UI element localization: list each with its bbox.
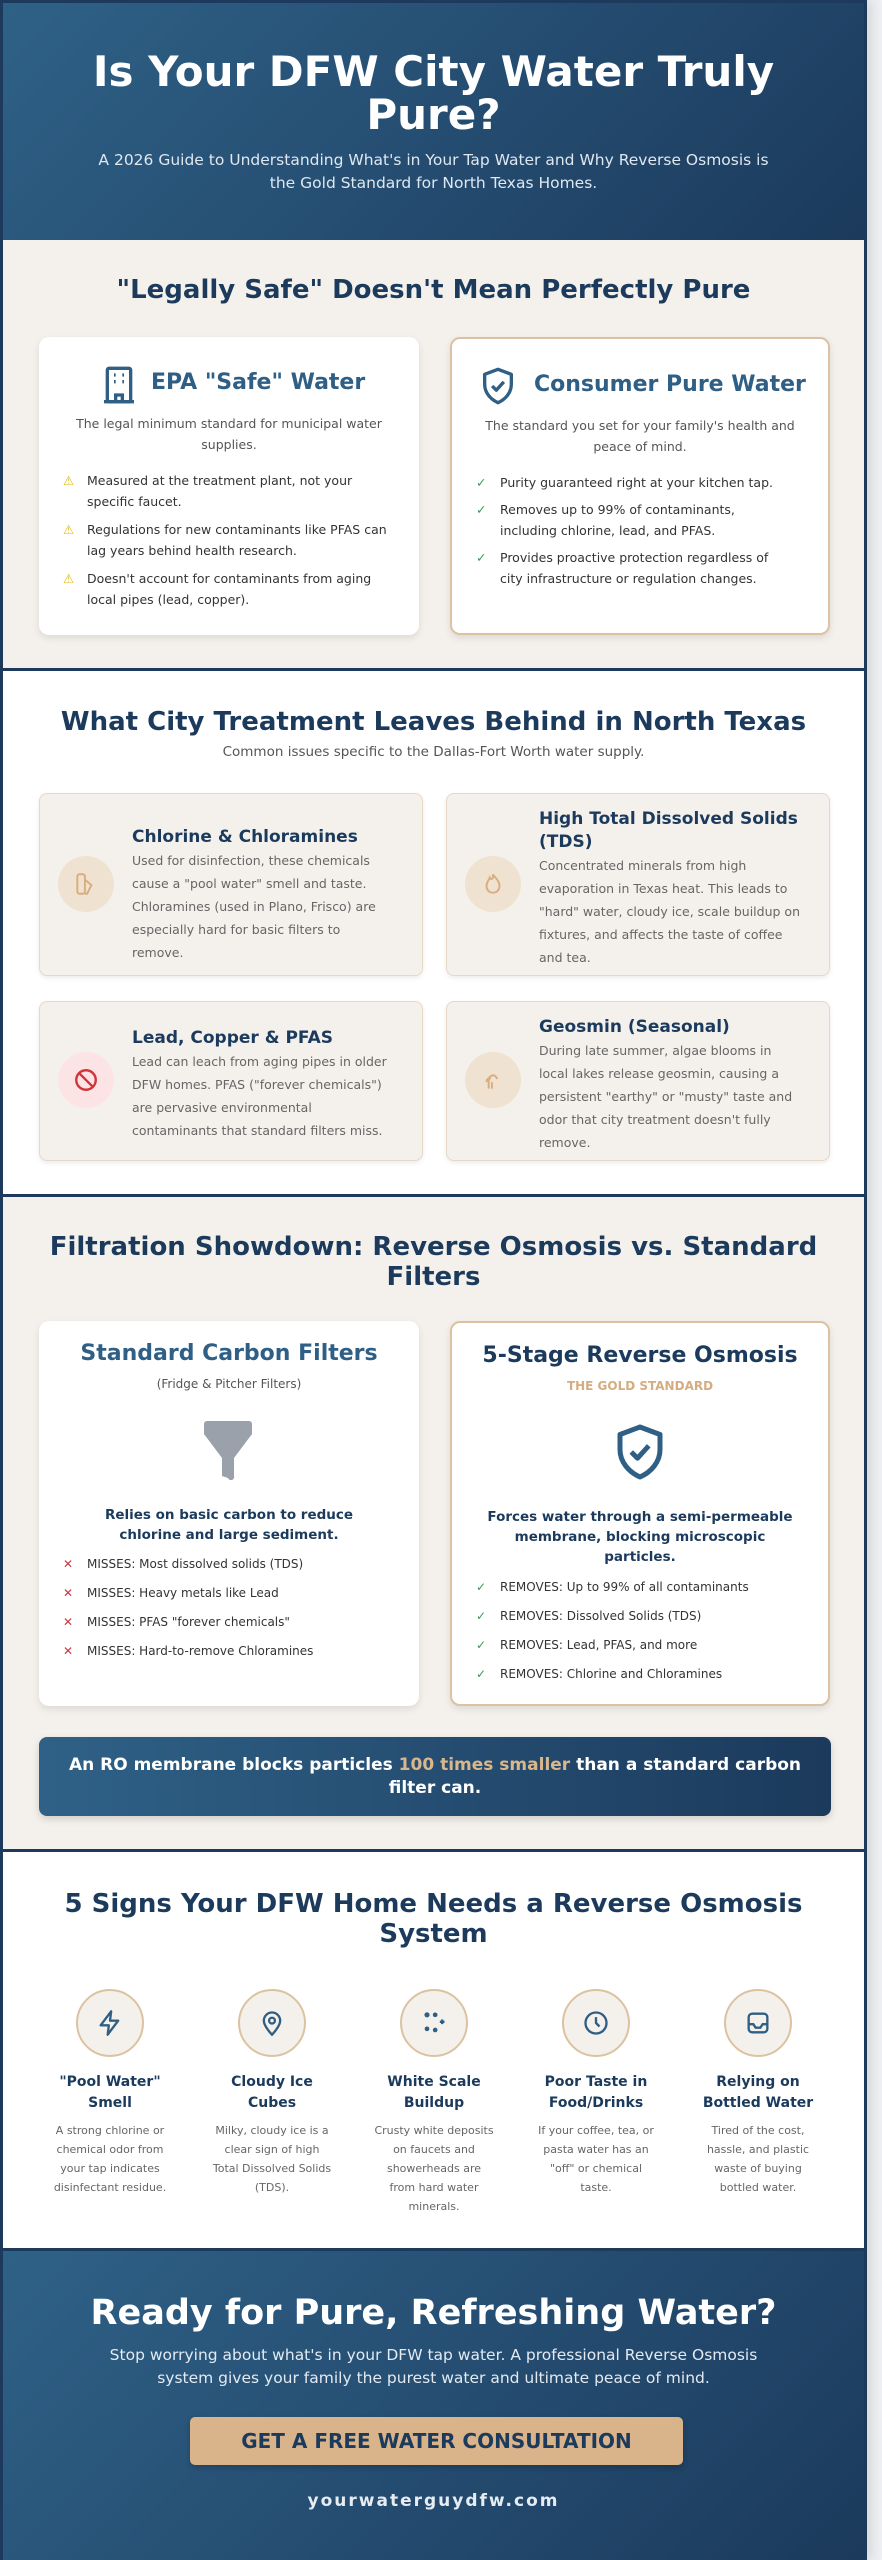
section: legally safe [3,240,864,671]
sign 5: Bottled Water [703,2095,813,2111]
card: RO: ✓ [476,1667,486,1681]
icon [58,1052,114,1108]
card: RO: ✓ [476,1609,486,1623]
sign 3 [374,1989,494,2213]
card: carbon: MISSES: PFAS "forever chemicals" [87,1615,290,1629]
lead text [487,1509,793,1565]
card: RO: THE GOLD STANDARD [567,1379,713,1393]
title: Consumer Pure Water [534,372,806,397]
callout banner [39,1737,831,1816]
card: TDS [446,793,830,976]
sign 2: Milky, cloudy ice is a clear sign of high [215,2124,329,2156]
CTA text: system gives your family the purest water and ultimate peace of mind. [157,2369,710,2387]
CTA heading: Ready for Pure, Refreshing Water? [91,2293,776,2333]
card: geosmin: During late summer, algae blooms in [539,1043,771,1058]
card: RO: ✓ [476,1638,486,1652]
card: consumer pure: Removes up to 99% of contaminants, including chlorine, lead, and PFAS. [500,502,735,538]
card: carbon [39,1321,419,1706]
card: geosmin: local lakes release geosmin, causing a persistent "earthy" or "musty" taste and odor that city treatment doesn't fully remove. [539,1066,792,1150]
sign 2: Total Dissolved Solids (TDS). [213,2162,331,2194]
card: carbon: ✕ [63,1615,73,1629]
lead text: Forces water through a semi-permeable [487,1509,793,1525]
sign 3: White Scale [387,2074,481,2090]
sign 1: Smell [88,2095,132,2111]
icon: shield [618,1424,662,1480]
CTA footer [3,2248,864,2560]
sign 3: Crusty white deposits on faucets and showerheads are from hard water minerals. [374,2124,494,2213]
lead text: particles. [604,1549,676,1565]
sign 3: Buildup [404,2095,464,2111]
icon [58,856,114,912]
card: EPA: Doesn't account for contaminants from aging local pipes (lead, copper). [87,571,371,607]
heading: "Legally Safe" Doesn't Mean Perfectly Pure [117,275,750,305]
card: carbon: (Fridge & Pitcher Filters) [157,1377,301,1391]
subtitle: the Gold Standard for North Texas Homes. [270,174,597,192]
sign 2: Cubes [248,2095,296,2111]
title: Is Your DFW City Water Truly [93,47,774,96]
card: consumer pure: Provides proactive protection regardless of city infrastructure or regulation changes. [500,550,768,586]
sign 5: Relying on [716,2074,800,2090]
sign 1: A strong chlorine or chemical odor from your tap indicates disinfectant residue. [54,2124,166,2194]
card: RO: REMOVES: Dissolved Solids (TDS) [500,1609,701,1623]
icon: building [104,366,134,404]
CTA text [110,2346,757,2387]
card: carbon: MISSES: Hard-to-remove Chloramines [87,1644,313,1658]
CTA text: Stop worrying about what's in your DFW tap water. A professional Reverse Osmosis [110,2346,757,2364]
button [190,2417,683,2465]
card: lead: Lead can leach from aging pipes in older DFW homes. PFAS ("forever chemicals") are pervasive environmental contaminants that standard filters miss. [132,1054,387,1138]
bullets: Purity guaranteed right at your kitchen tap. [500,475,773,490]
card: EPA: Regulations for new contaminants like PFAS can lag years behind health research. [87,522,387,558]
header [3,3,864,240]
sign 4 [538,1989,654,2194]
title: EPA "Safe" Water [151,370,365,395]
card: carbon: ✕ [63,1586,73,1600]
card: carbon: ✕ [63,1644,73,1658]
sign 5: Tired of the cost, hassle, and plastic waste of buying bottled water. [707,2124,809,2194]
sign 5 [703,1989,814,2194]
card: lead: Lead, Copper & PFAS [132,1028,333,1048]
card: EPA: ⚠ [63,522,74,537]
sign 4: Food/Drinks [549,2095,643,2111]
icon: funnel [204,1421,252,1480]
card: EPA [39,337,419,635]
title: Standard Carbon Filters [80,1341,378,1366]
card: consumer pure: ✓ [476,550,486,565]
bullets: Measured at the treatment plant, not your specific faucet. [87,473,352,509]
sign 1: "Pool Water" [59,2074,161,2090]
heading: What City Treatment Leaves Behind in North Texas [61,707,806,737]
subheading: Common issues specific to the Dallas-Fort Worth water supply. [223,744,644,760]
section: filtration showdown [3,1197,864,1852]
subtitle: A 2026 Guide to Understanding What's in Your Tap Water and Why Reverse Osmosis is [98,151,769,169]
heading: Filters [387,1262,480,1292]
description: The standard you set for your family's health and peace of mind. [485,418,795,454]
heading [50,1232,817,1292]
sign 2: Cloudy Ice [231,2074,313,2090]
heading: Filtration Showdown: Reverse Osmosis vs. Standard [50,1232,817,1262]
icon [465,1052,521,1108]
misses list: MISSES: Most dissolved solids (TDS) [87,1557,303,1571]
title: 5-Stage Reverse Osmosis [482,1343,798,1368]
sign 2 [212,1989,331,2194]
title [93,47,774,139]
card: RO: REMOVES: Chlorine and Chloramines [500,1667,722,1681]
removes list: REMOVES: Up to 99% of all contaminants [500,1580,749,1594]
url: yourwaterguydfw.com [308,2491,559,2511]
card: TDS: Concentrated minerals from high evaporation in Texas heat. This leads to "hard" water, cloudy ice, scale buildup on fixtures, and affects the taste of coffee and tea. [539,858,800,965]
heading [65,1889,802,1949]
card: EPA: ⚠ [63,571,74,586]
section: 5 signs [3,1852,864,2248]
sign 4: Poor Taste in [545,2074,647,2090]
lead text: Relies on basic carbon to reduce chlorine and large sediment. [105,1507,353,1543]
card: consumer pure: ✓ [476,502,486,517]
removes list: ✓ [476,1580,486,1594]
card: chlorine: Used for disinfection, these chemicals cause a "pool water" smell and taste. Chloramines (used in Plano, Frisco) are especially hard for basic filters to remove. [132,853,376,960]
card: geosmin [446,1001,830,1161]
subtitle [98,151,769,192]
card: chlorine [39,793,423,976]
card: carbon: MISSES: Heavy metals like Lead [87,1586,279,1600]
button: GET A FREE WATER CONSULTATION [241,2429,632,2453]
card: RO [450,1321,830,1706]
card: lead [39,1001,423,1161]
misses list: ✕ [63,1557,73,1571]
lead text: membrane, blocking microscopic [515,1529,765,1545]
card: chlorine: Chlorine & Chloramines [132,827,358,847]
icon: shield [483,368,513,404]
icon [465,856,521,912]
heading: 5 Signs Your DFW Home Needs a Reverse Osmosis [65,1889,802,1919]
card: RO: REMOVES: Lead, PFAS, and more [500,1638,697,1652]
callout banner: filter can. [389,1778,481,1798]
title: Pure? [366,90,501,139]
sign 1 [54,1989,166,2194]
description: The legal minimum standard for municipal water supplies. [76,416,382,452]
card: consumer pure [450,337,830,635]
heading: System [379,1919,488,1949]
card: TDS: High Total Dissolved Solids (TDS) [539,809,798,852]
section: what treatment leaves behind [3,671,864,1197]
sign 4: If your coffee, tea, or pasta water has an "off" or chemical taste. [538,2124,654,2194]
bullets: ✓ [476,475,486,490]
bullets: ⚠ [63,473,74,488]
callout banner: An RO membrane blocks particles 100 times smaller than a standard carbon [69,1755,801,1775]
card: geosmin: Geosmin (Seasonal) [539,1017,730,1037]
